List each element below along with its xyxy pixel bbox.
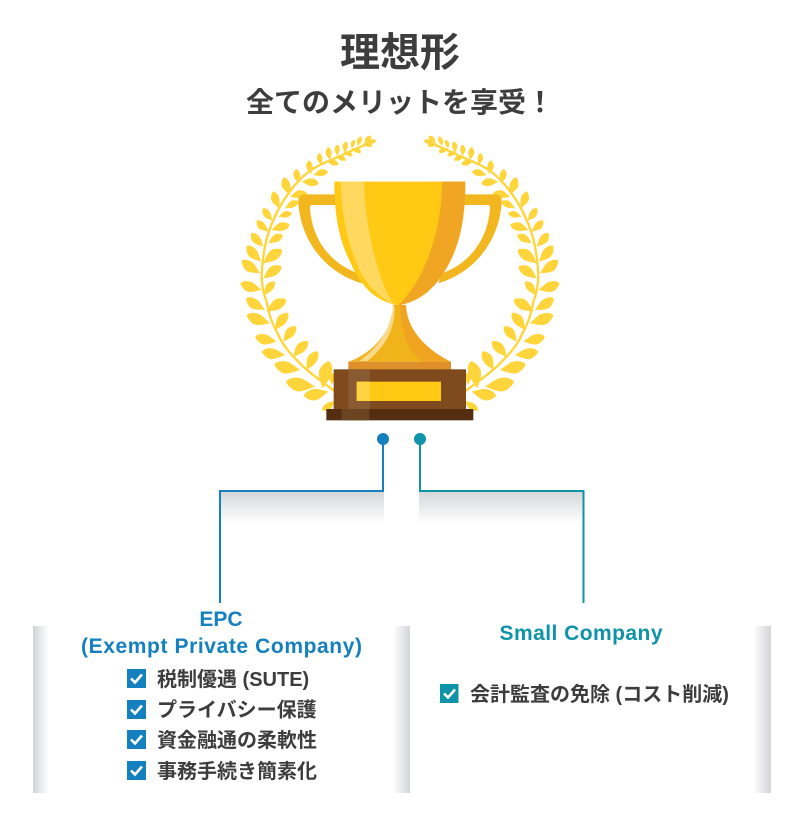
title: 理想形 [340,31,460,75]
panel: EPC [33,608,410,793]
item: privacy: プライバシー保護 [157,698,317,722]
item: paperwork: 事務手続き簡素化 [157,760,317,783]
heading: Exempt Private Company: (Exempt Private Company) [81,635,362,658]
subtitle: 全てのメリットを享受！ [246,87,554,118]
item: audit exemption: 会計監査の免除 (コスト削減) [470,682,729,706]
panel: Small Company [440,622,771,793]
trophy handles [298,194,502,283]
laurel wreath [239,134,561,414]
heading: EPC: EPC [199,608,243,631]
connector: EPC [220,433,389,603]
connector: Small Company [414,433,584,603]
trophy cup [334,182,465,305]
item: tax: 税制優遇 (SUTE) [157,668,309,691]
trophy stem [348,305,451,362]
trophy base [326,362,473,420]
icon: trophy with laurel wreath [239,134,561,420]
list: EPC benefits [127,668,317,783]
heading: Small Company: Small Company [500,622,663,645]
item: funding: 資金融通の柔軟性 [157,729,317,752]
